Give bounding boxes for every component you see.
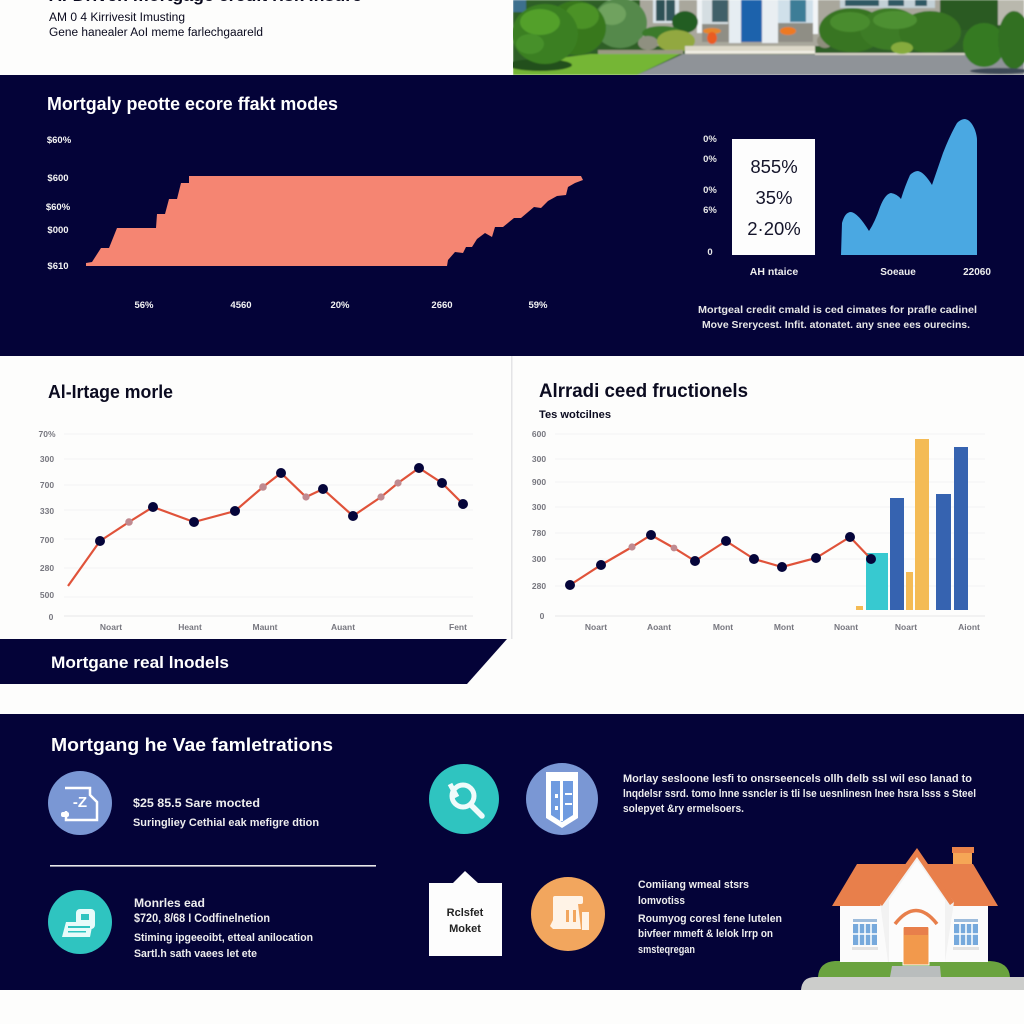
line chart: left: 700 (40, 480, 54, 490)
stat card: percentages: 855% (750, 156, 798, 177)
line chart: left: 70% (38, 429, 56, 439)
area chart: salmon: $000 (47, 225, 69, 236)
combo chart: right (532, 429, 985, 632)
combo chart: right: 780 (532, 528, 546, 538)
text block: coming notes: lomvotiss (638, 895, 685, 907)
text block: second feature (134, 898, 313, 960)
panel: navy features section (0, 714, 1024, 990)
callout: market card: Moket (449, 923, 481, 935)
area chart: salmon: 56% (134, 300, 154, 311)
icon: teal cards (48, 890, 112, 954)
area chart: salmon (46, 135, 583, 311)
panel: navy score section (0, 75, 1024, 356)
stat card: percentages: 0% (703, 185, 717, 196)
icon: orange tools (531, 877, 605, 951)
area chart: blue: Soeaue (880, 267, 916, 278)
area chart: salmon: $600 (47, 173, 69, 184)
text block: first feature: $25 85.5 Sare mocted (133, 798, 260, 810)
text block: second feature: Stiming ipgeeoibt, etteal anilocation (134, 932, 313, 944)
text block: coming notes: Roumyog coresl fene lutelen (638, 913, 782, 925)
text block: credit caption (698, 304, 977, 331)
text block: mortgage description: lnqdelsr ssrd. tomo lnne ssncler is tli lse uesnlinesn lnee hsra lsss s Steel (623, 788, 976, 800)
banner: real models: Mortgane real lnodels (51, 653, 229, 672)
callout: market card: Rclsfet (447, 907, 484, 919)
text block: mortgage description: Morlay sesloone lesfi to onsrseencels ollh delb ssl wil eso lanad to (623, 773, 972, 785)
combo chart: right: 300 (532, 554, 546, 564)
combo chart: right: 300 (532, 502, 546, 512)
combo chart: right: 280 (532, 581, 546, 591)
area chart: salmon: $60% (46, 202, 71, 213)
line chart: left: 700 (40, 535, 54, 545)
text block: mortgage description: solepyet &ry ermelsoers. (623, 803, 744, 815)
stat card: percentages (703, 134, 815, 278)
banner: real models (0, 639, 507, 684)
combo chart: right: Mont (774, 622, 794, 632)
text block: credit caption: Mortgeal credit cmald is ced cimates for prafle cadinel (698, 304, 977, 316)
text block: coming notes (638, 879, 782, 956)
combo chart: right: Mont (713, 622, 733, 632)
icon: blue document: -Z (73, 794, 87, 811)
line chart: left (38, 429, 473, 632)
area chart: salmon: 2660 (431, 300, 453, 311)
area chart: salmon: 59% (528, 300, 548, 311)
combo chart: right: Noant (834, 622, 858, 632)
line chart: left: Noart (100, 622, 122, 632)
header text block: Gene hanealer AoI meme farlechgaareld (49, 27, 263, 39)
heading: left chart: Al-Irtage morle (48, 382, 173, 402)
combo chart: right: Aiont (958, 622, 980, 632)
header text block (49, 0, 362, 39)
icon: teal magnifier (429, 764, 499, 834)
heading: right chart: Tes wotcilnes (539, 409, 611, 421)
line chart: left: 330 (40, 506, 54, 516)
combo chart: right: 0 (540, 611, 545, 621)
text block: second feature: $720, 8/68 I Codfinelnetion (134, 913, 270, 925)
area chart: salmon: 4560 (230, 300, 252, 311)
combo chart: right: 900 (532, 477, 546, 487)
text block: credit caption: Move Srerycest. Infit. atonatet. any snee ees ourecins. (702, 319, 970, 331)
text block: second feature: Sartl.h sath vaees let ete (134, 948, 257, 960)
text block: second feature: Monrles ead (134, 898, 205, 910)
combo chart: right: Aoant (647, 622, 671, 632)
combo chart: right: Noart (895, 622, 917, 632)
line chart: left: 500 (40, 590, 54, 600)
combo chart: right: Noart (585, 622, 607, 632)
text block: coming notes: smsteqregan (638, 944, 695, 956)
stat card: percentages: 0% (703, 134, 717, 145)
area chart: salmon: 20% (330, 300, 350, 311)
area chart: blue (841, 119, 991, 278)
line chart: left: Maunt (252, 622, 278, 632)
combo chart: right: 600 (532, 429, 546, 439)
text block: first feature: Suringliey Cethial eak mefigre dtion (133, 817, 319, 829)
area chart: salmon: $60% (47, 135, 72, 146)
line chart: left: Fent (449, 622, 467, 632)
header text block: AM 0 4 Kirrivesit Imusting (49, 10, 185, 24)
text block: coming notes: Comiiang wmeal stsrs (638, 879, 749, 891)
heading: right chart: Alrradi ceed fructionels (539, 381, 748, 402)
icon: blue document (48, 771, 112, 835)
icon: blue building shield (526, 763, 598, 835)
area chart: blue: 22060 (963, 267, 991, 278)
line chart: left: Auant (331, 622, 355, 632)
illustration: house (801, 847, 1024, 990)
line chart: left: 0 (49, 612, 54, 622)
text block: coming notes: bivfeer mmeft & lelok lrrp on (638, 928, 773, 940)
header photo: house with garden (508, 0, 1024, 75)
callout: market card (429, 871, 502, 956)
stat card: percentages: AH ntaice (750, 266, 798, 278)
stat card: percentages: 0 (707, 247, 713, 258)
heading: score section: Mortgaly peotte ecore ffakt modes (47, 94, 338, 114)
area chart: salmon: $610 (47, 261, 69, 272)
text block: mortgage description (623, 773, 976, 815)
combo chart: right: 300 (532, 454, 546, 464)
stat card: percentages: 35% (755, 187, 793, 208)
stat card: percentages: 2·20% (747, 218, 801, 239)
stat card: percentages: 0% (703, 154, 717, 165)
line chart: left: Heant (178, 622, 202, 632)
stat card: percentages: 6% (703, 205, 717, 216)
text block: first feature (133, 798, 319, 829)
line chart: left: 300 (40, 454, 54, 464)
line chart: left: 280 (40, 563, 54, 573)
heading: right chart (539, 381, 748, 421)
heading: features: Mortgang he Vae famletrations (51, 735, 333, 755)
